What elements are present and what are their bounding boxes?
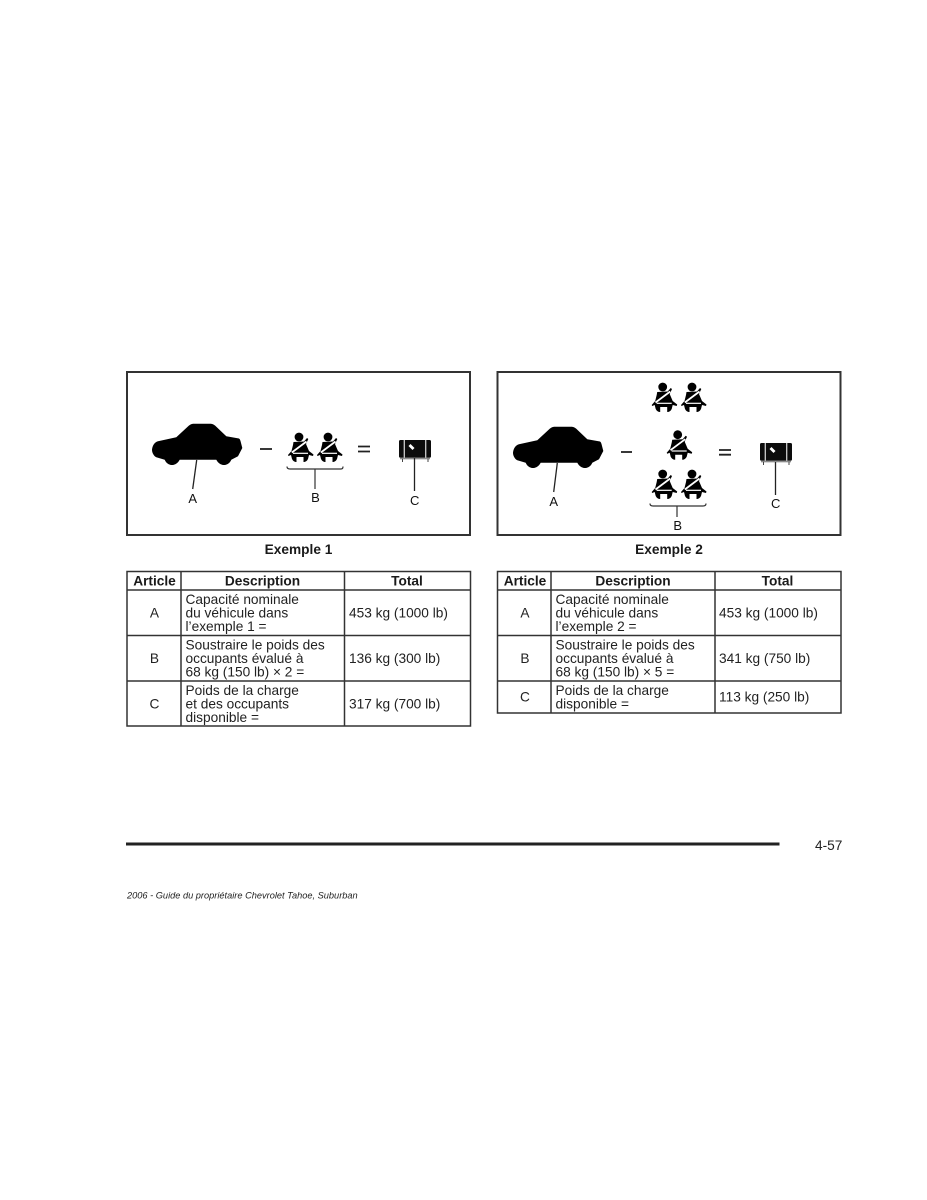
row B: Soustraire le poids des <box>556 637 695 652</box>
row B: occupants évalué à <box>186 651 304 666</box>
row C: C <box>520 689 530 704</box>
icon: cargo <box>399 440 431 462</box>
table header: Total <box>391 573 423 588</box>
table header <box>504 573 793 588</box>
row A: A <box>520 605 530 620</box>
minus sign <box>621 451 632 453</box>
table: example 2 <box>498 572 841 713</box>
row A: 453 kg (1000 lb) <box>719 605 818 620</box>
row C: 317 kg (700 lb) <box>349 696 440 711</box>
heading: Exemple 2: Exemple 2 <box>635 542 703 557</box>
row C: et des occupants <box>186 696 289 711</box>
row C <box>150 683 440 725</box>
callout line and label A <box>188 460 197 506</box>
row C: Poids de la charge <box>186 683 299 698</box>
panel: example 2 diagram <box>498 372 840 535</box>
icon: vehicle A <box>152 424 242 465</box>
row B: 341 kg (750 lb) <box>719 651 810 666</box>
icons: five occupants <box>652 383 706 499</box>
icons: two occupants <box>288 433 342 462</box>
equals sign <box>719 450 731 455</box>
bracket and label B: B <box>673 518 682 533</box>
row C: C <box>150 696 160 711</box>
icon: vehicle A <box>513 427 603 468</box>
footer note: 2006 - Guide du propriétaire Chevrolet Tahoe, Suburban <box>126 890 358 900</box>
callout line and label C <box>771 462 780 511</box>
bracket and label B: B <box>311 490 320 505</box>
bracket and label B <box>287 466 343 505</box>
table header: Description <box>595 573 671 588</box>
row B: Soustraire le poids des <box>186 637 325 652</box>
callout line and label C: C <box>410 493 419 508</box>
row A: A <box>150 605 160 620</box>
row B <box>150 637 440 679</box>
row B <box>520 637 810 679</box>
icon: cargo <box>760 443 792 465</box>
row C: Poids de la charge <box>556 683 669 698</box>
table header <box>133 573 423 588</box>
row C <box>520 683 809 711</box>
row A: Capacité nominale <box>186 592 299 607</box>
row B: occupants évalué à <box>556 651 674 666</box>
row B: 136 kg (300 lb) <box>349 651 440 666</box>
row C: 113 kg (250 lb) <box>719 689 809 704</box>
row B: B <box>520 651 530 666</box>
row A <box>520 592 818 634</box>
row B: 68 kg (150 lb) × 2 = <box>186 664 304 679</box>
row A: Capacité nominale <box>556 592 669 607</box>
row C: disponible = <box>556 696 629 711</box>
row B: B <box>150 651 159 666</box>
row A: l’exemple 1 = <box>186 619 267 634</box>
footer rule <box>126 842 780 846</box>
table header: Total <box>762 573 793 588</box>
table header: Article <box>133 573 176 588</box>
table header: Description <box>225 573 300 588</box>
row A: 453 kg (1000 lb) <box>349 605 448 620</box>
callout line and label A <box>549 463 558 509</box>
callout line and label C: C <box>771 496 780 511</box>
callout line and label A: A <box>549 494 558 509</box>
row A <box>150 592 448 634</box>
callout line and label C <box>410 458 419 508</box>
page number: 4-57 <box>815 838 842 853</box>
table: example 1 <box>127 572 470 726</box>
row A: du véhicule dans <box>186 605 288 620</box>
table header: Article <box>504 573 547 588</box>
bracket and label B <box>650 504 706 533</box>
row A: l’exemple 2 = <box>556 619 637 634</box>
panel: example 1 diagram <box>127 372 470 535</box>
minus sign <box>260 448 272 450</box>
row C: disponible = <box>186 710 259 725</box>
heading: Exemple 1: Exemple 1 <box>265 542 333 557</box>
row A: du véhicule dans <box>556 605 658 620</box>
row B: 68 kg (150 lb) × 5 = <box>556 664 674 679</box>
equals sign <box>358 446 370 452</box>
callout line and label A: A <box>188 491 197 506</box>
